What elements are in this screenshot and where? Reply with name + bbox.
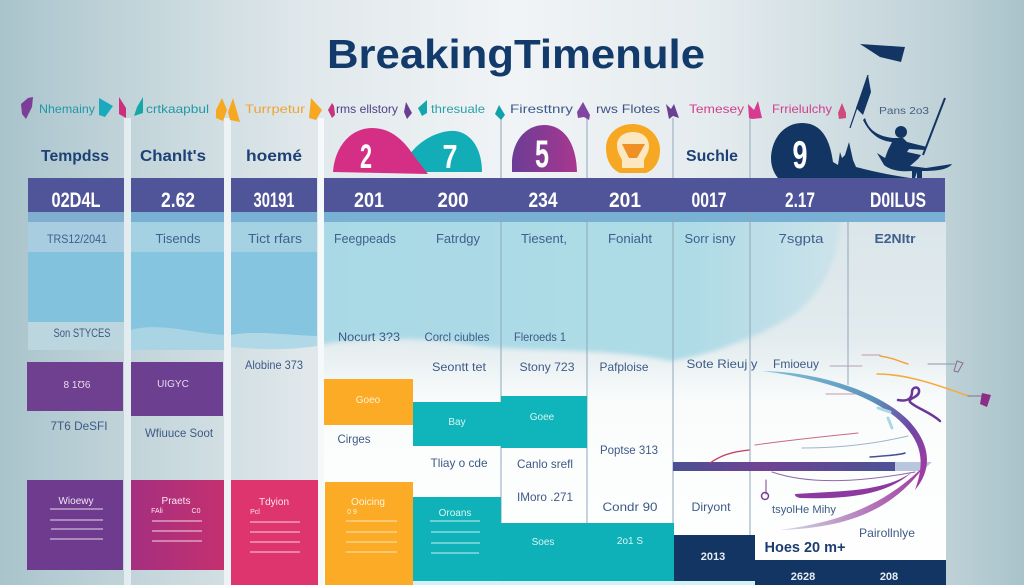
row: middle labels: Corcl ciubles (424, 330, 490, 344)
flag labels row (21, 97, 930, 122)
row: middle labels: Fmioeuy (773, 357, 819, 371)
row: middle labels: Alobine 373 (245, 358, 303, 372)
flag texts (39, 102, 930, 117)
card: teal with lines (413, 497, 501, 581)
row: middle labels: Hoes 20 m+ (764, 539, 846, 556)
sub-headings row (41, 148, 738, 165)
card: pink (231, 480, 318, 585)
right columns wash (318, 215, 946, 585)
block: teal row 2 column 6: Goee (530, 412, 555, 423)
row: middle labels: Diryont (692, 500, 731, 514)
header bar: 200 (438, 189, 468, 212)
row: middle labels: Son STYCES (54, 326, 110, 340)
header bar: 2.62 (161, 189, 195, 212)
block: orange row 2 (324, 379, 413, 425)
header bar: 02D4L (52, 189, 101, 212)
icon: purple dome with 5 (512, 125, 577, 176)
chart: swoosh timeline (673, 355, 991, 530)
flag texts: Nhemainy (39, 102, 95, 116)
card: orange (325, 482, 413, 585)
row: first data labels: 7sgpta (778, 231, 824, 246)
icon: purple rider squiggle (898, 388, 940, 421)
row: first data labels: Sorr isny (684, 231, 736, 246)
row: first data labels: Fatrdgy (436, 231, 480, 246)
card: magenta (131, 480, 224, 570)
card: teal with lines: Oroans (439, 508, 471, 519)
row: middle labels: Seontt tet (432, 360, 487, 374)
row: first data labels: Foniaht (608, 231, 652, 246)
header bar: 234 (528, 189, 558, 212)
title: BreakingTimenule (327, 31, 705, 77)
block: navy step: 2013 (701, 551, 725, 563)
card: purple: Wioewy (58, 496, 94, 507)
row: middle labels: Stony 723 (520, 360, 575, 374)
card: magenta: Praets (162, 496, 190, 507)
timeline bar (673, 462, 932, 471)
row: first data labels: Feegpeads (334, 231, 396, 246)
icon: teal dome with 7 (400, 131, 482, 175)
icon: orange badge (606, 124, 660, 173)
flag icons (21, 97, 846, 122)
card: magenta: FAli (151, 508, 163, 515)
row: middle labels: Canlo srefl (517, 457, 573, 471)
sub-headings row: hoemé (246, 148, 302, 165)
row: first data labels (47, 231, 916, 246)
row: middle labels: Condr 90 (602, 500, 658, 514)
row: first data labels: TRS12/2041 (47, 232, 107, 246)
row: first data labels: Tiesent, (521, 231, 567, 246)
icon: small purple marker (980, 393, 991, 407)
row: middle labels (50, 326, 915, 556)
column wash: third column (231, 222, 317, 349)
icon: magenta dome with 2 (333, 128, 428, 176)
swoosh: lower purple arc (795, 472, 912, 498)
row: middle labels: Tliay o cde (430, 456, 488, 470)
flag texts: rws Flotes (596, 102, 660, 116)
row: middle labels: Wfiuuce Soot (145, 426, 214, 440)
strip: pale base line (413, 581, 755, 585)
header strip (28, 212, 945, 222)
header bar: 201 (609, 189, 641, 212)
icon: figure with flag (850, 75, 952, 178)
sub-headings row: Tempdss (41, 148, 109, 165)
flag texts: Frrielulchy (772, 102, 832, 116)
block: navy step (674, 535, 946, 585)
icon: small knot (762, 492, 768, 500)
flag texts: rms ellstory (336, 102, 398, 116)
block: teal row 2 column 6 (501, 396, 587, 448)
row: middle labels: 7T6 DeSFI (50, 419, 108, 433)
card: orange: Ooicing (351, 497, 385, 508)
row: first data labels: Tict rfars (248, 231, 303, 246)
icon: purple dome with 5: 5 (535, 133, 549, 176)
icon: magenta dome with 2: 2 (360, 138, 372, 176)
header bar: 0017 (692, 189, 726, 212)
block: teal row 2 column 5: Bay (448, 417, 466, 428)
flag texts: thresuale (431, 102, 485, 116)
icon: navy dome with 9 and city skyline: 9 (792, 134, 808, 177)
row: middle labels: Poptse 313 (600, 443, 658, 457)
row: middle labels: IMoro .271 (517, 490, 573, 504)
card: pink: Pcl (250, 509, 260, 516)
header bar: 2.17 (785, 189, 815, 212)
card: pink: Tdyion (259, 497, 289, 508)
block: navy step: 2628 (791, 571, 815, 583)
icon: flying banner (860, 44, 905, 62)
card: magenta: C0 (192, 508, 201, 515)
row: middle labels: Pafploise (600, 360, 649, 374)
row: middle labels: Cirges (338, 432, 370, 446)
swoosh: blue to purple arc (762, 371, 927, 490)
row: middle labels: Sote Rieuj y (686, 357, 758, 371)
block: orange row 2: Goeo (356, 395, 381, 406)
block: navy step: 208 (880, 571, 898, 583)
block: purple row 2 column 2 (131, 362, 223, 416)
sub-headings row: Suchle (686, 148, 738, 165)
block: purple row 2 column 1 (27, 362, 123, 411)
card: orange: 0 9 (347, 509, 357, 516)
row: middle labels: tsyolHe Mihy (772, 504, 836, 516)
sub-headings row: Chanlt's (140, 148, 206, 165)
header bar (28, 178, 945, 212)
header bar: 201 (354, 189, 384, 212)
flag texts: crtkaapbul (146, 102, 209, 116)
block: purple row 2 column 2: UIGYC (157, 379, 189, 390)
icon: teal dome with 7: 7 (442, 138, 458, 175)
card: purple (27, 480, 123, 570)
flag texts: Pans 2o3 (879, 106, 930, 117)
header bar: 30191 (254, 189, 295, 212)
header bar: D0ILUS (870, 189, 926, 212)
block: purple row 2 column 1: 8 1Ʊ6 (64, 380, 91, 391)
panel: timeline table body (28, 212, 946, 585)
icon: outline marker (954, 361, 963, 372)
row: first data labels: E2NItr (874, 231, 916, 246)
column wash: second column (131, 222, 224, 350)
block: teal bottom wide: 2o1 S (617, 536, 643, 547)
row: middle labels: Nocurt 3?3 (338, 330, 400, 344)
flag texts: Turrpetur (245, 102, 305, 116)
row: middle labels: Pairollnlye (859, 526, 915, 540)
block: teal row 2 column 5 (413, 402, 501, 446)
block: teal bottom wide: Soes (532, 537, 554, 548)
block: teal bottom wide (501, 523, 674, 581)
column wash: first column (28, 222, 124, 350)
row: first data labels: Tisends (156, 231, 201, 246)
thin accent lines (710, 355, 990, 494)
row: middle labels: Fleroeds 1 (514, 330, 566, 344)
flag texts: Firesttnry (510, 102, 573, 116)
column dividers (124, 118, 848, 585)
flag texts: Temesey (689, 102, 744, 116)
swoosh: fading tail (780, 465, 925, 530)
icon: navy dome with 9 and city skyline (771, 123, 910, 178)
